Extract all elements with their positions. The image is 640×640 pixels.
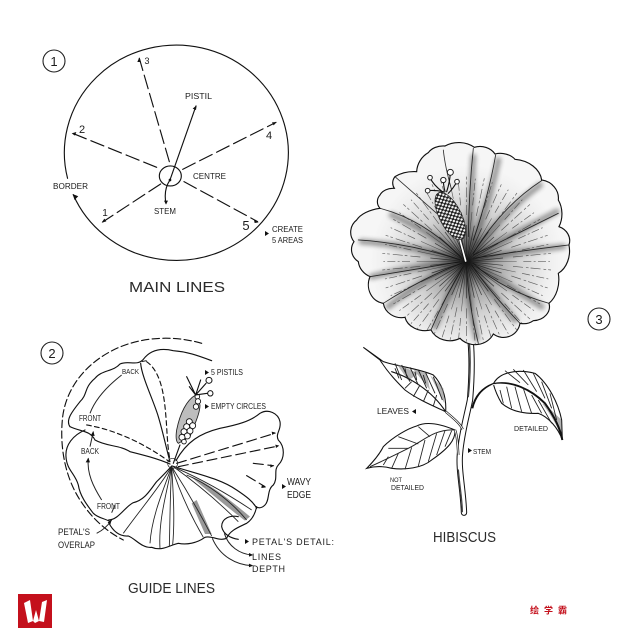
labels: EMPTY CIRCLES — [211, 402, 266, 411]
step number 3 — [588, 308, 610, 330]
panel 3: finished hibiscus — [351, 143, 610, 546]
heading: hibiscus: HIBISCUS — [433, 529, 496, 546]
radial detail strokes on outer petals — [382, 177, 551, 347]
labels: BACK — [81, 447, 100, 456]
heading: guide lines: GUIDE LINES — [128, 580, 215, 597]
icon: right leaf — [472, 369, 562, 440]
labels: 3 — [144, 56, 150, 66]
labels: STEM — [154, 207, 176, 216]
labels: PETAL'S DETAIL: — [252, 537, 334, 547]
icon: hibiscus flower — [351, 143, 570, 347]
step number 1: 1 — [50, 54, 58, 69]
labels: BORDER — [53, 182, 88, 191]
labels: CREATE — [272, 225, 303, 234]
labels — [377, 407, 549, 492]
labels: PETAL'S — [58, 527, 90, 537]
labels — [53, 56, 303, 245]
labels: 2 — [79, 124, 85, 136]
labels: STEM — [473, 447, 491, 456]
flower outline and shading — [351, 143, 570, 345]
step number 2 — [41, 342, 63, 364]
radial detail strokes near centre — [417, 212, 517, 311]
main lines diagram — [64, 45, 288, 260]
labels: 5 AREAS — [272, 236, 303, 245]
heading: main lines: MAIN LINES — [129, 279, 225, 296]
guide lines diagram — [62, 338, 283, 567]
step number 3: 3 — [595, 312, 603, 327]
step number 2: 2 — [48, 346, 56, 361]
labels: 5 PISTILS — [211, 368, 243, 377]
petal fold lines — [358, 148, 569, 343]
labels — [58, 367, 334, 574]
labels: BACK — [122, 367, 139, 376]
labels: CENTRE — [193, 172, 226, 181]
petal fold shadows — [362, 157, 563, 338]
labels: FRONT — [97, 502, 120, 511]
labels: PISTIL — [185, 92, 213, 101]
labels: 4 — [266, 130, 272, 142]
labels: DETAILED — [391, 485, 424, 492]
labels: LEAVES — [377, 407, 409, 416]
icon: main stem — [458, 342, 472, 513]
labels: 5 — [242, 218, 250, 233]
labels: NOT — [390, 477, 402, 484]
labels: WAVY — [287, 477, 311, 488]
icon: lower left leaf — [367, 424, 458, 469]
logo — [18, 594, 52, 628]
stem and leaves — [363, 342, 562, 513]
labels: DEPTH — [252, 564, 285, 574]
labels: OVERLAP — [58, 540, 95, 550]
labels: 1 — [102, 208, 108, 219]
step number 1 — [43, 50, 65, 72]
labels: EDGE — [287, 490, 311, 501]
labels: DETAILED — [514, 424, 549, 433]
panel 2: guide lines — [41, 338, 334, 597]
labels: LINES — [252, 552, 281, 562]
watermark text: 绘学霸 — [530, 604, 572, 616]
icon: upper left leaf — [363, 347, 463, 429]
panel 1: main lines — [43, 45, 303, 296]
labels: FRONT — [79, 414, 101, 423]
pistil — [425, 169, 472, 262]
